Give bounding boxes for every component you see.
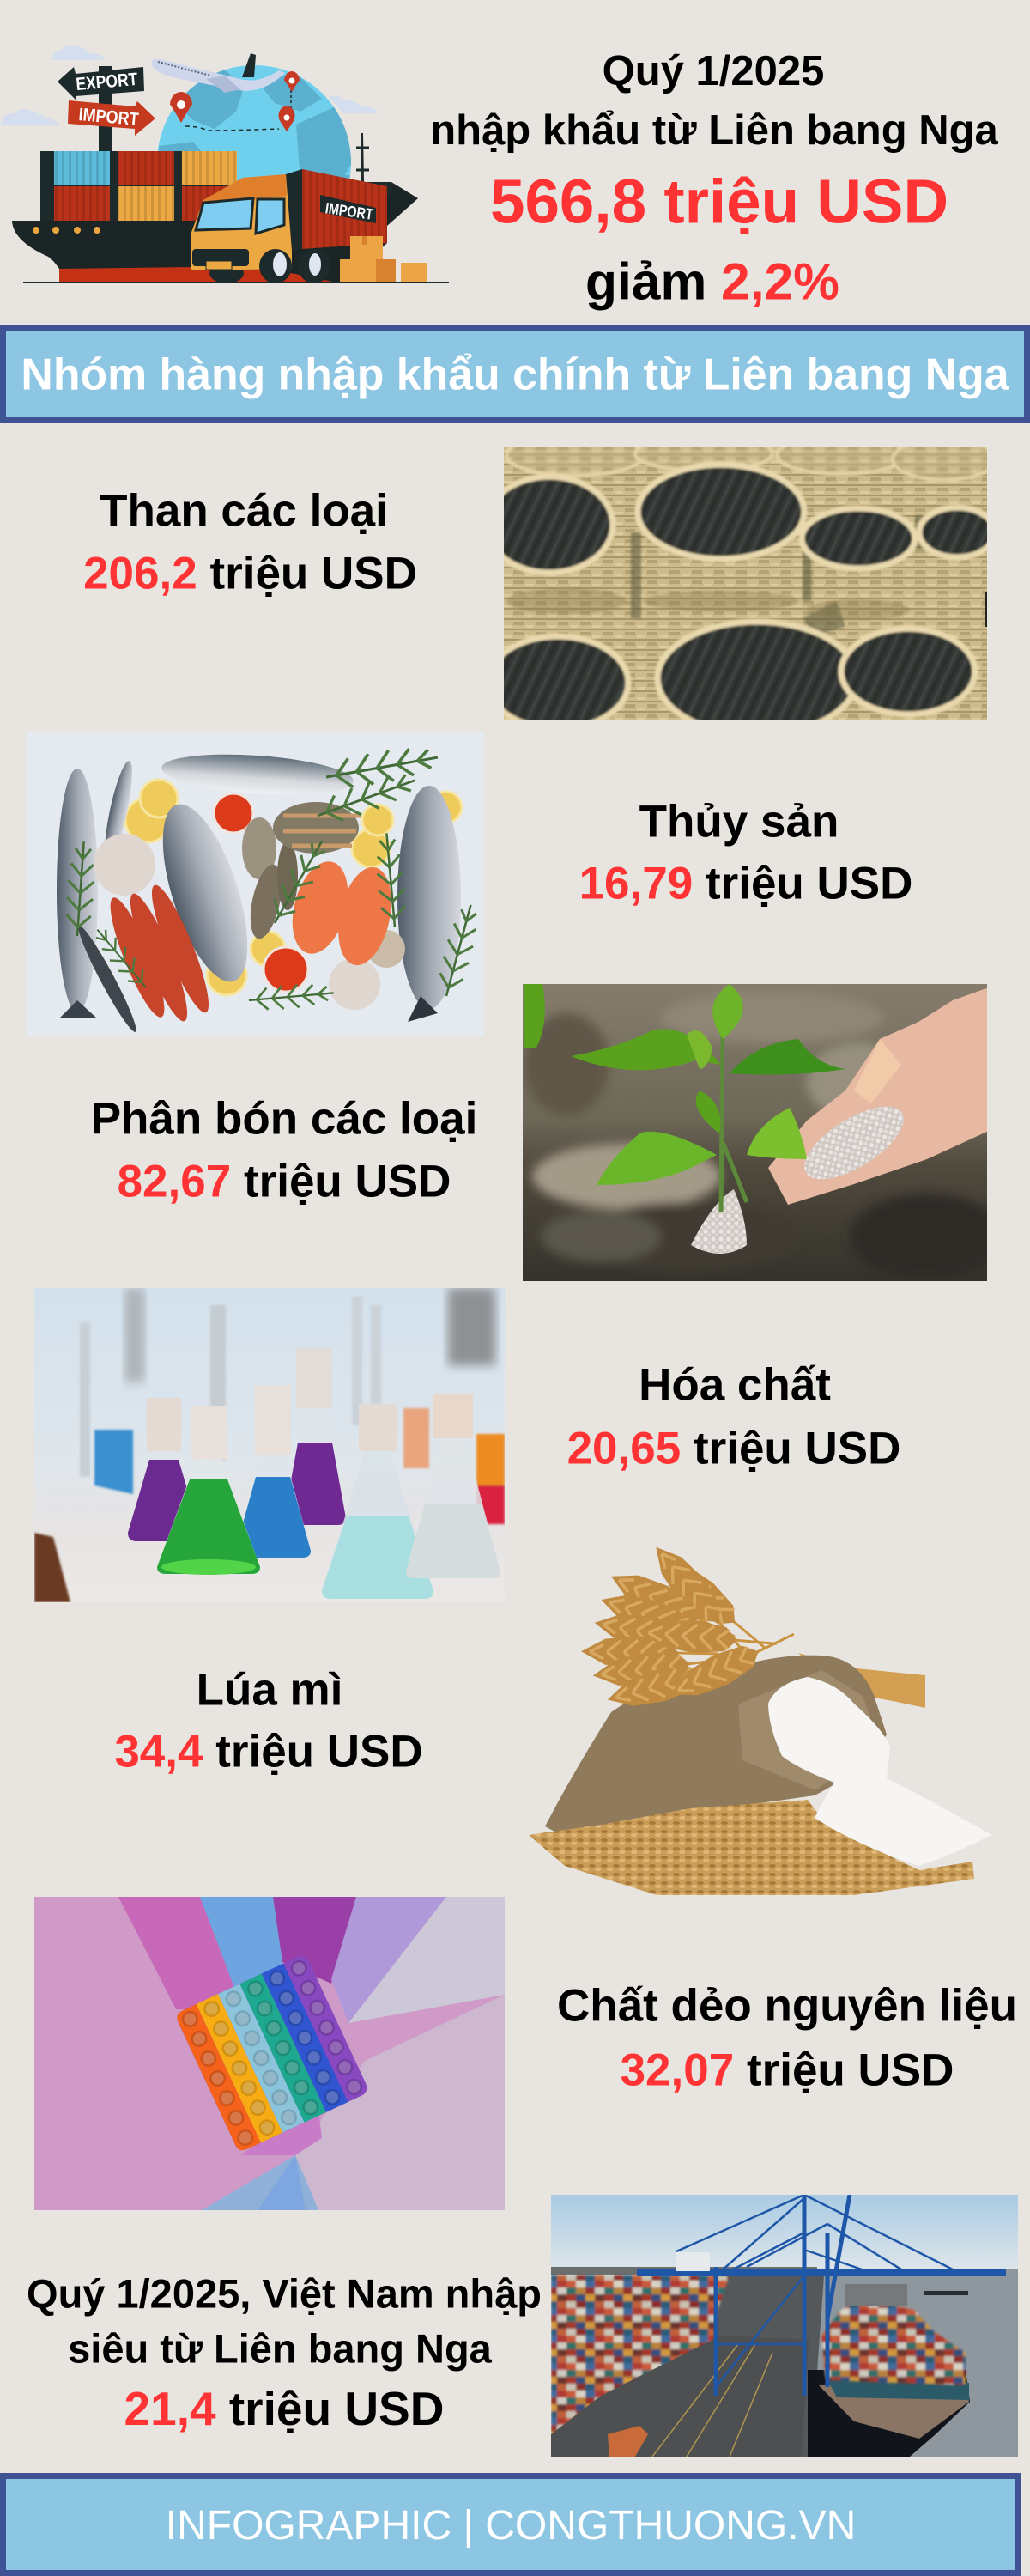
text: chemicals [567, 1360, 900, 1473]
footer banner [3, 2476, 1018, 2573]
wheat stalks [798, 1653, 925, 1708]
subject line: nhập khẩu từ Liên bang Nga [430, 107, 999, 154]
icon: clouds [0, 45, 380, 125]
text: trade deficit summary [27, 2270, 542, 2435]
item: wheat sack and flour [529, 1537, 991, 1895]
text: fertilizer: Phân bón các loại [91, 1094, 477, 1144]
text: wheat: 34,4 triệu USD [114, 1726, 423, 1777]
text: seafood [579, 797, 912, 908]
icon: export sign: EXPORT [76, 70, 138, 94]
text: trade deficit summary: Quý 1/2025, Việt Nam nhập [27, 2270, 542, 2317]
section banner: Nhóm hàng nhập khẩu chính từ Liên bang Nga [21, 349, 1010, 398]
heading text [430, 48, 999, 311]
container yard [551, 2275, 730, 2434]
item: container port photo [551, 2195, 1018, 2457]
fertilizer pellets on soil [691, 1189, 747, 1254]
decline figure: giảm 2,2% [585, 252, 839, 311]
pop-it toy [174, 1953, 370, 2153]
text: seafood: 16,79 triệu USD [579, 859, 912, 908]
caviar bowls [214, 793, 308, 992]
text: plastics [557, 1980, 1017, 2095]
ground [712, 2276, 824, 2457]
rosemary sprigs [64, 742, 483, 1012]
blue flask [244, 1385, 311, 1558]
text: chemicals: Hóa chất [639, 1360, 831, 1410]
icon: ship hull [12, 133, 418, 283]
text: plastics: Chất dẻo nguyên liệu [557, 1980, 1017, 2032]
item: pop-it toy on coloured paper [34, 1897, 505, 2210]
text: trade deficit summary: 21,4 triệu USD [124, 2382, 444, 2435]
main figure: 566,8 triệu USD [490, 167, 948, 237]
period line: Quý 1/2025 [603, 48, 824, 94]
wheat ears [581, 1537, 801, 1716]
ship containers [821, 2299, 966, 2385]
grain pile [529, 1800, 974, 1895]
icon: cardboard boxes [340, 236, 427, 282]
text: coal [83, 486, 417, 599]
text: trade deficit summary: siêu từ Liên bang Nga [68, 2325, 493, 2372]
salmon steaks [292, 861, 391, 965]
text: coal: 206,2 triệu USD [83, 548, 417, 599]
octopus [94, 834, 405, 1010]
text: coal: Than các loại [100, 486, 388, 536]
item: chemicals photo [34, 1288, 505, 1602]
icon: truck [191, 169, 387, 283]
illustration: cargo ship, truck, globe and plane [0, 45, 449, 283]
text: wheat [114, 1664, 423, 1777]
item: seafood photo [27, 732, 484, 1036]
icon: globe [158, 65, 351, 181]
purple flask [128, 1398, 187, 1541]
blue cranes [637, 2195, 1006, 2396]
ground line [23, 282, 449, 283]
item: fertilizer photo [523, 984, 1004, 1281]
flour [768, 1677, 991, 1866]
aqua flask [322, 1404, 433, 1599]
icon: signpost [58, 66, 155, 152]
clear flask [406, 1394, 500, 1578]
icon: import sign: IMPORT [78, 105, 140, 130]
red prawns [110, 884, 209, 1022]
photo: charcoal in bamboo baskets [504, 447, 987, 720]
hand [768, 987, 989, 1205]
header section [0, 45, 999, 310]
water [811, 2269, 1018, 2457]
fish [57, 749, 461, 1036]
road [551, 2336, 809, 2457]
icon: stacked containers [54, 151, 237, 221]
background glassware [34, 1288, 505, 1602]
lemons [125, 780, 462, 995]
icon: truck: IMPORT [324, 199, 374, 223]
text: seafood: Thủy sản [639, 797, 839, 847]
section banner [3, 328, 1027, 421]
ship hull [808, 2370, 970, 2457]
text: chemicals: 20,65 triệu USD [567, 1424, 900, 1473]
second purple flask [291, 1348, 346, 1525]
green flask [157, 1406, 260, 1575]
text: wheat: Lúa mì [197, 1664, 342, 1716]
plant [524, 984, 845, 1212]
coloured paper fans [118, 1897, 505, 2210]
text: plastics: 32,07 triệu USD [621, 2045, 954, 2095]
burlap sack [545, 1656, 887, 1833]
text: fertilizer [91, 1094, 477, 1207]
icon: location pins and route [170, 71, 300, 131]
item: coal [504, 447, 987, 720]
footer banner: INFOGRAPHIC | CONGTHUONG.VN [166, 2503, 856, 2549]
truck container [608, 2426, 648, 2457]
icon: airplane [151, 53, 285, 93]
port sign [676, 2252, 710, 2271]
distant barge [924, 2291, 968, 2295]
text: fertilizer: 82,67 triệu USD [118, 1156, 451, 1207]
oysters and prawns [242, 802, 360, 941]
fertilizer pellets in palm [804, 1106, 904, 1180]
